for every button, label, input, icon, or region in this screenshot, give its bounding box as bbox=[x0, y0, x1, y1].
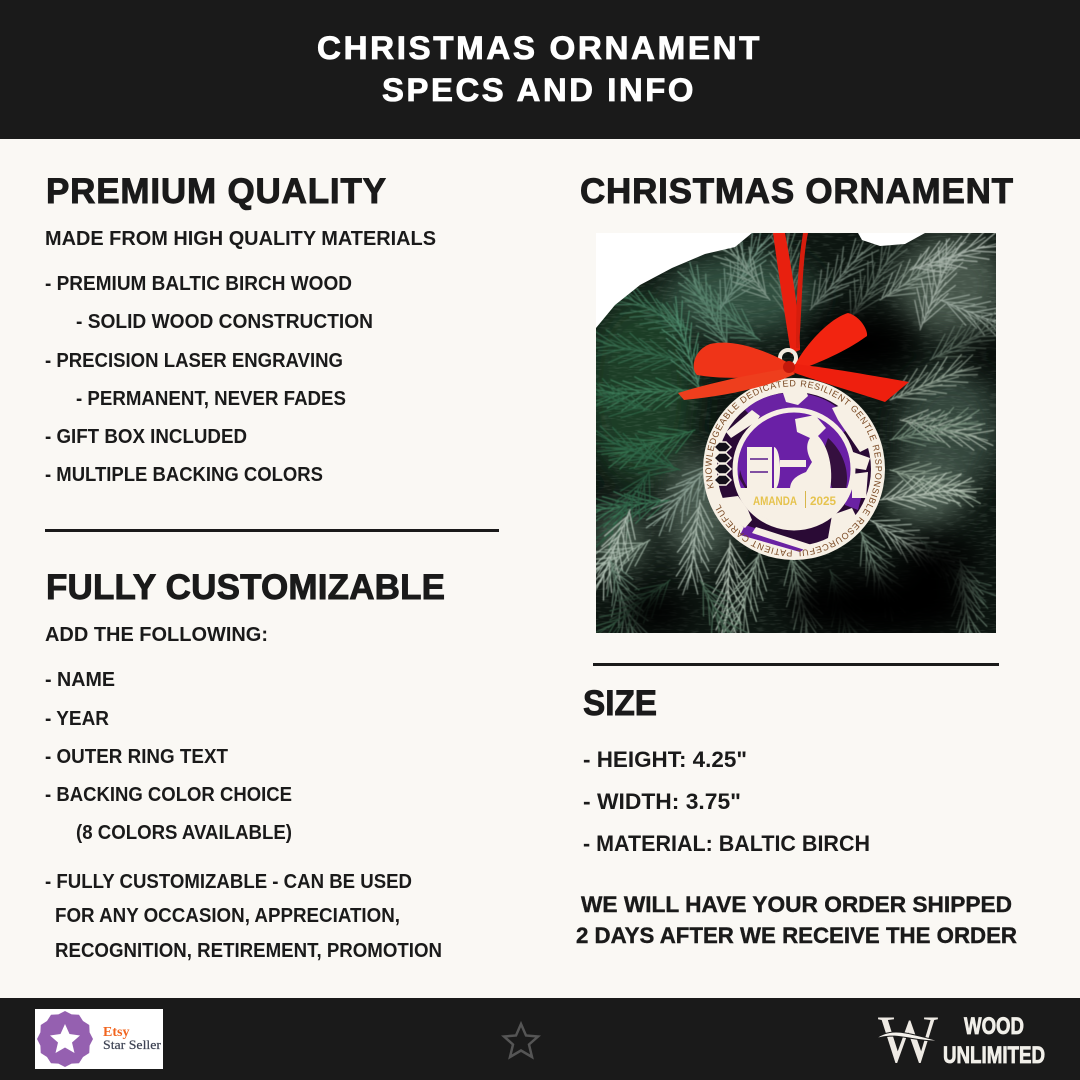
logo wordmark bbox=[943, 1013, 1045, 1069]
panel: premium quality bbox=[45, 172, 436, 486]
inner ring bbox=[735, 410, 853, 528]
occasion note: FOR ANY OCCASION, APPRECIATION, bbox=[55, 905, 400, 927]
feature list: - SOLID WOOD CONSTRUCTION bbox=[76, 311, 373, 333]
heading: premium quality: PREMIUM QUALITY bbox=[46, 172, 386, 211]
dark shadow patches bbox=[620, 313, 1003, 639]
logo wordmark: WOOD bbox=[964, 1013, 1024, 1040]
icon: purple scalloped seal bbox=[37, 1011, 93, 1067]
size specifications bbox=[583, 747, 870, 856]
hexagon honeycomb bbox=[714, 442, 731, 485]
etsy star seller badge bbox=[35, 1009, 163, 1069]
ribbon loop bbox=[773, 233, 808, 354]
customization list: - OUTER RING TEXT bbox=[45, 746, 228, 768]
intro text: ADD THE FOLLOWING: bbox=[45, 624, 268, 646]
feature list: - GIFT BOX INCLUDED bbox=[45, 426, 247, 448]
footer band bbox=[0, 998, 1080, 1080]
tool silhouettes on outer band bbox=[722, 388, 874, 551]
occasion note: RECOGNITION, RETIREMENT, PROMOTION bbox=[55, 940, 442, 962]
ornament: 2025 bbox=[810, 494, 836, 508]
customization list: - BACKING COLOR CHOICE bbox=[45, 784, 292, 806]
shipping note: WE WILL HAVE YOUR ORDER SHIPPED bbox=[581, 892, 1012, 917]
purple backing bbox=[717, 392, 871, 546]
heading: size: SIZE bbox=[583, 684, 657, 723]
engraved name and year: AMANDA bbox=[753, 494, 797, 508]
panel: fully customizable bbox=[45, 568, 445, 962]
logo mark: W with swoosh: W bbox=[878, 1001, 939, 1077]
heading: fully customizable: FULLY CUSTOMIZABLE bbox=[46, 568, 445, 607]
size specifications: - WIDTH: 3.75" bbox=[583, 789, 741, 814]
shipping note bbox=[576, 892, 1017, 948]
customization list bbox=[45, 669, 292, 844]
customization list: - YEAR bbox=[45, 708, 110, 730]
wood disc bbox=[703, 378, 885, 560]
white background areas bbox=[596, 233, 925, 328]
etsy wordmark: Etsy bbox=[103, 1025, 129, 1040]
feature list bbox=[45, 273, 373, 486]
pine needles bbox=[596, 233, 996, 633]
icon: white star bbox=[50, 1024, 80, 1053]
ornament bbox=[703, 348, 885, 560]
intro text: MADE FROM HIGH QUALITY MATERIALS bbox=[45, 228, 436, 250]
wood unlimited logo bbox=[878, 1001, 1045, 1077]
feature list: - MULTIPLE BACKING COLORS bbox=[45, 464, 323, 486]
occasion note bbox=[45, 871, 442, 962]
title: CHRISTMAS ORNAMENT bbox=[317, 30, 762, 66]
star seller label: Star Seller bbox=[103, 1037, 162, 1052]
feature list: - PREMIUM BALTIC BIRCH WOOD bbox=[45, 273, 352, 295]
title: SPECS AND INFO bbox=[382, 72, 696, 108]
size specifications: - MATERIAL: BALTIC BIRCH bbox=[583, 831, 870, 856]
beekeeper and hive silhouette bbox=[747, 415, 831, 490]
feature list: - PERMANENT, NEVER FADES bbox=[76, 388, 346, 410]
logo wordmark: UNLIMITED bbox=[943, 1042, 1045, 1069]
feature list: - PRECISION LASER ENGRAVING bbox=[45, 350, 343, 372]
occasion note: - FULLY CUSTOMIZABLE - CAN BE USED bbox=[45, 871, 412, 893]
panel: size bbox=[583, 684, 870, 856]
heading: christmas ornament: CHRISTMAS ORNAMENT bbox=[580, 172, 1013, 211]
title bbox=[317, 30, 762, 108]
size specifications: - HEIGHT: 4.25" bbox=[583, 747, 747, 772]
header band bbox=[0, 0, 1080, 139]
customization list: - NAME bbox=[45, 669, 115, 691]
outer ring text: KNOWLEDGEABLE DEDICATED RESILIENT GENTLE RESPONSIBLE RESOURCEFUL PATIENT CAREFUL bbox=[705, 380, 882, 556]
photo: ornament on pine branches bbox=[596, 233, 996, 633]
customization list: (8 COLORS AVAILABLE) bbox=[76, 822, 292, 844]
ribbon bow bbox=[678, 313, 909, 402]
shipping note: 2 DAYS AFTER WE RECEIVE THE ORDER bbox=[576, 923, 1017, 948]
icon: outlined star bbox=[504, 1024, 538, 1057]
